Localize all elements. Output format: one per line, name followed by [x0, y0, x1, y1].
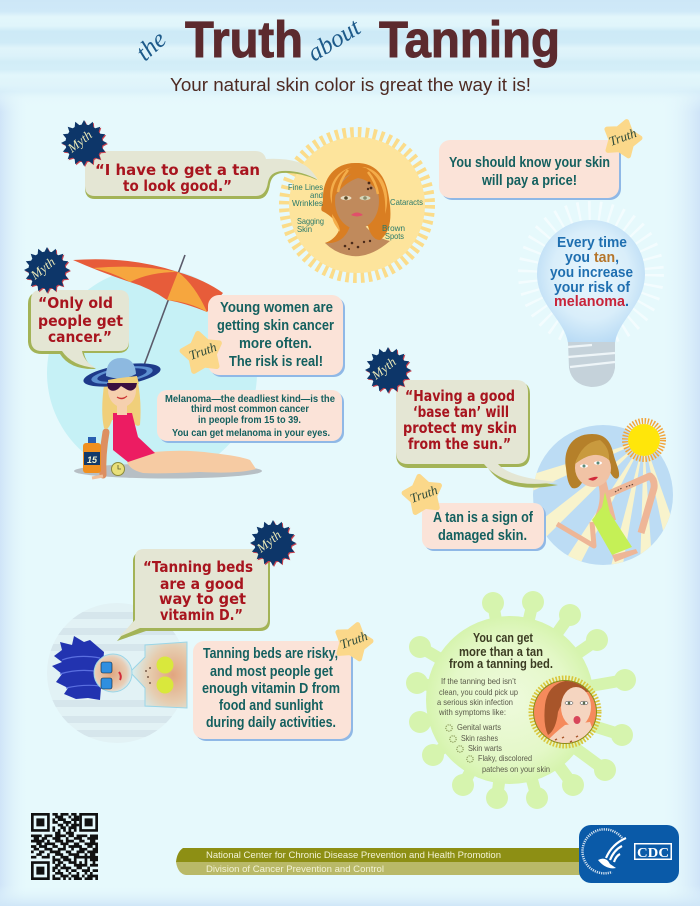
- bulb base: [568, 342, 615, 387]
- myth 4 quote: vitamin D.”: [160, 606, 243, 624]
- myth 4 quote: way to get: [159, 590, 246, 608]
- alarm clock: [112, 462, 124, 476]
- myth 3 quote: protect my skin: [403, 419, 517, 437]
- sky circle: [533, 425, 673, 565]
- truth 4 text: food and sunlight: [219, 697, 323, 714]
- virus paragraph: a serious skin infection: [437, 697, 513, 707]
- bulb text: your risk of: [554, 279, 631, 296]
- virus heading: more than a tan: [459, 645, 543, 659]
- myth badge 4: [250, 520, 297, 567]
- infected face medallion: [531, 678, 600, 750]
- myth badge 2: Myth: [27, 254, 58, 283]
- truth 1 box: [439, 140, 621, 200]
- title: [131, 11, 560, 68]
- woman's face illustration: [321, 163, 390, 256]
- truth 2 box: [208, 295, 345, 377]
- virus paragraph: with symptoms like:: [438, 707, 506, 717]
- symptom list: Skin warts: [468, 743, 502, 753]
- virus paragraph: [437, 676, 518, 717]
- truth badge 3: Truth: [408, 482, 440, 506]
- tanning bed scene: [50, 612, 188, 737]
- myth 2 speech bubble: [28, 290, 129, 369]
- truth badge 1: [602, 117, 643, 158]
- symptom list: patches on your skin: [482, 764, 550, 774]
- myth 4 quote: [143, 558, 253, 624]
- virus panel: [406, 591, 636, 809]
- truth 3 box: [422, 503, 546, 551]
- bulb glass: [537, 220, 645, 343]
- HHS eagle emblem: [582, 829, 626, 873]
- myth 2 quote: cancer.”: [48, 328, 112, 346]
- face labels: Cataracts: [390, 197, 423, 207]
- virus heading: [449, 631, 553, 671]
- truth badge 4: Truth: [338, 628, 370, 652]
- melanoma text: You can get melanoma in your eyes.: [172, 427, 330, 439]
- symptom list: Flaky, discolored: [478, 753, 532, 763]
- truth badge 2: Truth: [187, 339, 219, 363]
- myth 1 quote: [95, 161, 260, 195]
- face labels: Wrinkles: [292, 198, 323, 208]
- title: Truth: [185, 11, 303, 68]
- myth badge 1: Myth: [64, 127, 95, 156]
- truth 4 text: during daily activities.: [206, 714, 336, 731]
- myth badge 1: [61, 120, 108, 167]
- truth badge 3: [402, 473, 444, 514]
- face labels: Brown: [382, 223, 405, 233]
- truth 2 text: getting skin cancer: [217, 317, 334, 334]
- sunburned woman: [557, 434, 654, 562]
- QR code: [31, 813, 98, 880]
- bulb text: melanoma.: [554, 293, 629, 310]
- face labels: Fine Lines: [288, 182, 323, 192]
- title: about: [303, 13, 366, 67]
- sunscreen bottle: [83, 437, 101, 473]
- CDC logo: [579, 825, 679, 883]
- face labels: Sagging: [297, 216, 324, 226]
- melanoma text: third most common cancer: [191, 403, 309, 415]
- face labels: [288, 182, 423, 241]
- myth 3 speech bubble: [396, 380, 558, 488]
- melanoma text: Melanoma—the deadliest kind—is the: [165, 393, 335, 405]
- truth 4 box: [193, 641, 353, 741]
- truth 3 text: [433, 509, 534, 544]
- footer organization bars: National Center for Chronic Disease Prevention and Health Promotion: [206, 850, 501, 861]
- truth 4 text: and most people get: [210, 663, 333, 680]
- myth 1 quote: to look good.”: [123, 177, 232, 195]
- face labels: Spots: [385, 231, 404, 241]
- virus heading: from a tanning bed.: [449, 657, 553, 671]
- face labels: and: [310, 190, 323, 200]
- myth 4 quote: are a good: [160, 575, 244, 593]
- beach scene: [47, 255, 262, 478]
- myth 2 quote: people get: [38, 312, 124, 330]
- bulb text: [550, 234, 633, 310]
- myth 3 quote: from the sun.”: [408, 435, 511, 453]
- myth badge 4: Myth: [253, 527, 284, 556]
- sun rays: [286, 134, 428, 276]
- myth badge 2: [24, 247, 71, 294]
- myth 3 quote: [403, 387, 517, 453]
- truth badge 1: Truth: [607, 125, 639, 149]
- footer organization bars: Division of Cancer Prevention and Control: [206, 864, 384, 875]
- sunbather: [82, 358, 256, 478]
- umbrella: [73, 255, 223, 368]
- myth badge 3: Myth: [368, 354, 399, 383]
- melanoma text: [165, 393, 335, 439]
- bulb text: you increase: [550, 264, 633, 281]
- truth 3 text: A tan is a sign of: [433, 509, 534, 526]
- virus paragraph: clean, you could pick up: [439, 687, 518, 697]
- teal circle backdrop: [47, 268, 257, 478]
- myth 1 quote: “I have to get a tan: [95, 161, 260, 179]
- truth 2 text: [217, 299, 334, 370]
- myth 2 quote: “Only old: [38, 294, 113, 312]
- sun: [625, 421, 663, 459]
- myth 3 scene: woman in the sun: [530, 421, 673, 570]
- symptom list: Skin rashes: [461, 733, 498, 743]
- virus heading: You can get: [473, 631, 534, 645]
- melanoma fact box: [157, 390, 344, 443]
- myth 2 quote: [38, 294, 124, 346]
- myth badge 3: [365, 347, 412, 394]
- myth 1 speech bubble: [85, 151, 318, 199]
- light bulb callout: [528, 211, 654, 387]
- subtitle: Your natural skin color is great the way it is!: [170, 75, 531, 95]
- sunbather shadow: [74, 464, 262, 478]
- truth badge 2: [179, 330, 224, 373]
- truth 2 text: The risk is real!: [229, 353, 323, 370]
- melanoma text: in people from 15 to 39.: [198, 414, 301, 426]
- footer organization bars: [176, 848, 580, 875]
- myth 4 quote: “Tanning beds: [143, 558, 253, 576]
- sun beams: [533, 444, 670, 564]
- bulb text: Every time: [557, 234, 627, 251]
- title: the: [131, 26, 172, 66]
- person lying on tanning bed: [52, 636, 187, 708]
- symptom list: [446, 722, 550, 774]
- truth 2 text: Young women are: [220, 299, 333, 316]
- bed circle: [47, 603, 187, 743]
- myth 3 quote: “Having a good: [405, 387, 515, 405]
- truth 2 text: more often.: [239, 335, 312, 352]
- face labels: Skin: [297, 224, 312, 234]
- truth 3 text: damaged skin.: [438, 527, 527, 544]
- myth 4 speech bubble: [117, 549, 270, 641]
- sun with aged face: [286, 134, 428, 276]
- CDC wordmark: CDC: [637, 846, 669, 861]
- truth 4 text: Tanning beds are risky,: [203, 645, 338, 662]
- bed stripes: [51, 612, 176, 737]
- title: Tanning: [379, 11, 560, 68]
- sunscreen bottle: 15: [87, 455, 98, 465]
- truth badge 4: [333, 620, 374, 661]
- symptom list: Genital warts: [457, 722, 501, 732]
- truth 1 text: will pay a price!: [481, 172, 577, 189]
- truth 1 text: You should know your skin: [449, 154, 610, 171]
- truth 4 text: [202, 645, 340, 731]
- virus paragraph: If the tanning bed isn’t: [441, 676, 517, 686]
- bulb text: you tan,: [565, 249, 619, 266]
- truth 4 text: enough vitamin D from: [202, 680, 340, 697]
- virus shape: [406, 591, 636, 809]
- sun disc: [289, 137, 425, 273]
- truth 1 text: [449, 154, 610, 189]
- myth 3 quote: ‘base tan’ will: [413, 403, 509, 421]
- bulb glow rays: [528, 211, 654, 337]
